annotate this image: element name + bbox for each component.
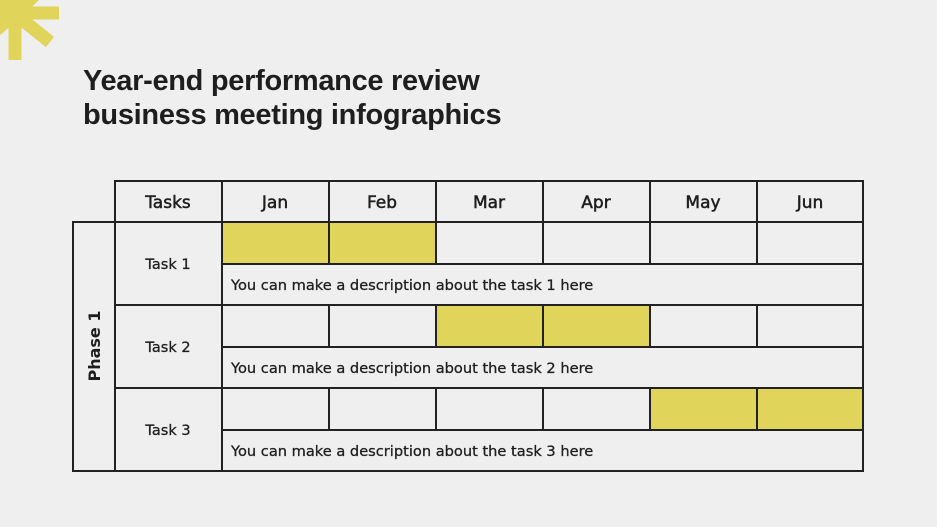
table: Jan	[261, 193, 288, 213]
table: Task 2	[144, 340, 191, 356]
title	[83, 65, 501, 131]
table: Mar	[473, 193, 505, 213]
table: Task 1	[144, 257, 191, 273]
table: May	[685, 193, 721, 213]
table: Phase 1	[85, 310, 104, 382]
table: You can make a description about the task 1 here	[230, 277, 593, 294]
title: Year-end performance review	[83, 65, 479, 97]
table: You can make a description about the task 3 here	[230, 443, 593, 460]
table: Tasks	[144, 193, 191, 213]
table: Feb	[367, 193, 397, 213]
table: Task 3	[144, 423, 191, 439]
table: You can make a description about the task 2 here	[230, 360, 593, 377]
table: Apr	[581, 193, 611, 213]
title: business meeting infographics	[83, 99, 501, 131]
icon: yellow asterisk	[0, 0, 59, 60]
table: Jun	[796, 193, 823, 213]
